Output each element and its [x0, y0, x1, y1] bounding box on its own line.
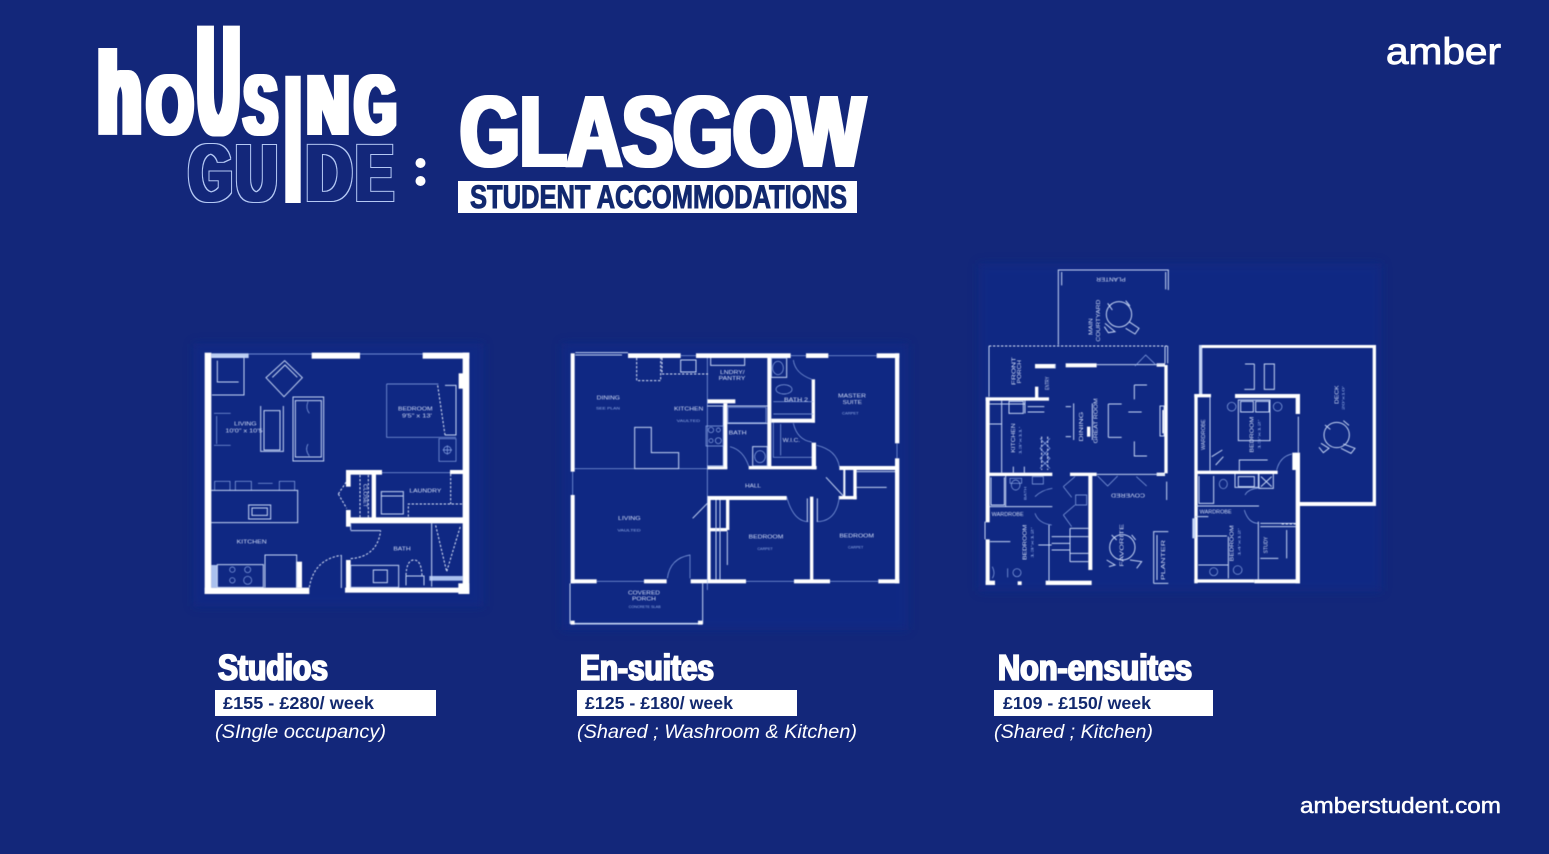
floor plan: en-suite: CARPET	[757, 547, 773, 551]
floor plan: non-ensuite: FAVORITE	[1120, 524, 1126, 567]
floor plan: non-ensuite: FRONT	[1012, 356, 1018, 385]
floor plan: non-ensuite: MAIN	[1088, 318, 1094, 335]
floor plan: non-ensuite: 13'x12'	[1031, 526, 1035, 558]
floor plan: en-suite: VAULTED	[617, 528, 642, 532]
heading: en-suites: En-suites	[580, 647, 714, 688]
price: studios: £155 - £280/ week	[223, 693, 374, 713]
title: housing guide: E	[356, 128, 393, 219]
heading: glasgow: GLASGOW	[460, 76, 865, 188]
floor plan: non-ensuite: BEDROOM	[1250, 416, 1256, 453]
floor plan: en-suite: VAULTED	[677, 419, 701, 423]
title: housing guide: G	[189, 128, 232, 219]
panel: non-ensuites	[994, 647, 1213, 743]
floor plan: non-ensuite: PORCH	[1017, 360, 1023, 383]
note: en-suites: (Shared ; Washroom & Kitchen)	[577, 722, 857, 743]
floor plan: en-suite: BEDROOM	[839, 533, 874, 539]
floor plan: non-ensuite: DECK	[1334, 385, 1340, 404]
floor plan: en-suite: PORCH	[632, 596, 656, 602]
floor plan: en-suite: SEE PLAN	[596, 406, 621, 410]
floor plan: en-suite: PANTRY	[719, 376, 746, 382]
floor plan: en-suite: SUITE	[843, 400, 862, 406]
heading: studios: Studios	[218, 647, 328, 688]
floor plan: en-suite: BATH	[729, 431, 747, 437]
floor plan: en-suite: MASTER	[838, 393, 866, 399]
floor plan: non-ensuite: 20'x10'	[1341, 385, 1345, 410]
floor plan: non-ensuite: BEDROOM	[1230, 525, 1236, 561]
panel: en-suites	[577, 647, 857, 743]
floor plan: en-suite	[562, 343, 908, 630]
title: housing guide: I	[281, 37, 305, 241]
price: en-suites	[577, 690, 797, 716]
floor plan: en-suite: LNDRY/	[720, 370, 745, 376]
banner: student accommodations: STUDENT ACCOMMODATIONS	[470, 179, 847, 215]
floor plan: non-ensuite: 14'x12'	[1237, 527, 1241, 556]
floor plan: en-suite: CARPET	[842, 412, 859, 416]
title: housing guide: N	[307, 58, 349, 152]
floor plan: non-ensuite: GREAT ROOM	[1094, 398, 1100, 443]
floor plan: non-ensuite: WARDROBE	[1201, 419, 1207, 450]
floor plan: non-ensuite: COVERED	[1111, 491, 1145, 497]
floor plan: studio: BEDROOM	[398, 407, 433, 413]
floor plan: non-ensuite: 13'x12'	[1257, 418, 1261, 449]
floor plan: non-ensuite: COURTYARD	[1096, 300, 1102, 342]
floor plan: non-ensuite: BATH	[1023, 486, 1027, 500]
floor plan: studio: 9'5" x 13'	[402, 413, 432, 419]
floor plan: en-suite: CONCRETE SLAB	[629, 605, 662, 609]
title: housing guide: S	[244, 58, 277, 152]
note: non-ensuites: (Shared ; Kitchen)	[994, 722, 1153, 743]
floor plan: studio: KITCHEN	[237, 539, 267, 545]
panel: studios	[215, 647, 436, 743]
floor plan: non-ensuite: STUDY	[1264, 536, 1270, 553]
heading: non-ensuites: Non-ensuites	[998, 647, 1192, 688]
floor plan: non-ensuite: WARDROBE	[1200, 509, 1232, 515]
floor plan: en-suite: COVERED	[628, 591, 660, 597]
floor plan: non-ensuite: ENTRY	[1045, 377, 1051, 390]
website url: amberstudent.com	[1300, 793, 1501, 818]
floor plan: en-suite: W.I.C.	[783, 438, 800, 444]
floor plan: en-suite: BEDROOM	[749, 535, 784, 541]
title: housing guide: G	[355, 58, 396, 152]
floor plan: non-ensuite: WARDROBE	[992, 512, 1024, 518]
price: non-ensuites	[994, 690, 1213, 716]
price: en-suites: £125 - £180/ week	[585, 693, 733, 713]
floor plan: non-ensuite	[978, 263, 1382, 592]
floor plan: non-ensuite: BEDROOM	[1022, 524, 1028, 560]
title colon	[416, 158, 426, 186]
title: housing guide: O	[147, 58, 193, 152]
floor plan: studio: CLOSET	[362, 484, 368, 508]
floor plan: studio: LAUNDRY	[409, 489, 442, 495]
floor plan: en-suite: DINING	[597, 395, 620, 401]
floor plan: en-suite: BATH 2	[784, 397, 808, 403]
floor plan: studio: BATH	[393, 547, 411, 553]
floor plan: non-ensuite: DINING	[1079, 412, 1085, 442]
floor plan: en-suite: CARPET	[848, 546, 863, 550]
title: housing guide: D	[306, 128, 352, 219]
floor plan: studio	[193, 343, 483, 607]
floor plan: en-suite: KITCHEN	[674, 407, 703, 413]
floor plan: non-ensuite: 13'x11'	[1019, 426, 1023, 455]
floor plan: studio: LIVING	[234, 422, 257, 428]
logo: amber: amber	[1386, 31, 1501, 72]
floor plan: studio: 10'0" x 10'5	[225, 428, 263, 434]
price: studios	[215, 690, 436, 716]
floor plan: en-suite: HALL	[745, 484, 761, 490]
title: housing guide: U	[236, 128, 277, 219]
floor plan: en-suite: LIVING	[618, 516, 641, 522]
floor plan: non-ensuite: KITCHEN	[1011, 423, 1017, 453]
title: housing guide	[98, 0, 396, 241]
floor plan: non-ensuite: PLANTER	[1096, 275, 1126, 281]
price: non-ensuites: £109 - £150/ week	[1003, 693, 1151, 713]
note: studios: (SIngle occupancy)	[215, 722, 386, 743]
floor plan: non-ensuite: PLANTER	[1161, 540, 1167, 580]
title: housing guide: h	[98, 28, 141, 159]
